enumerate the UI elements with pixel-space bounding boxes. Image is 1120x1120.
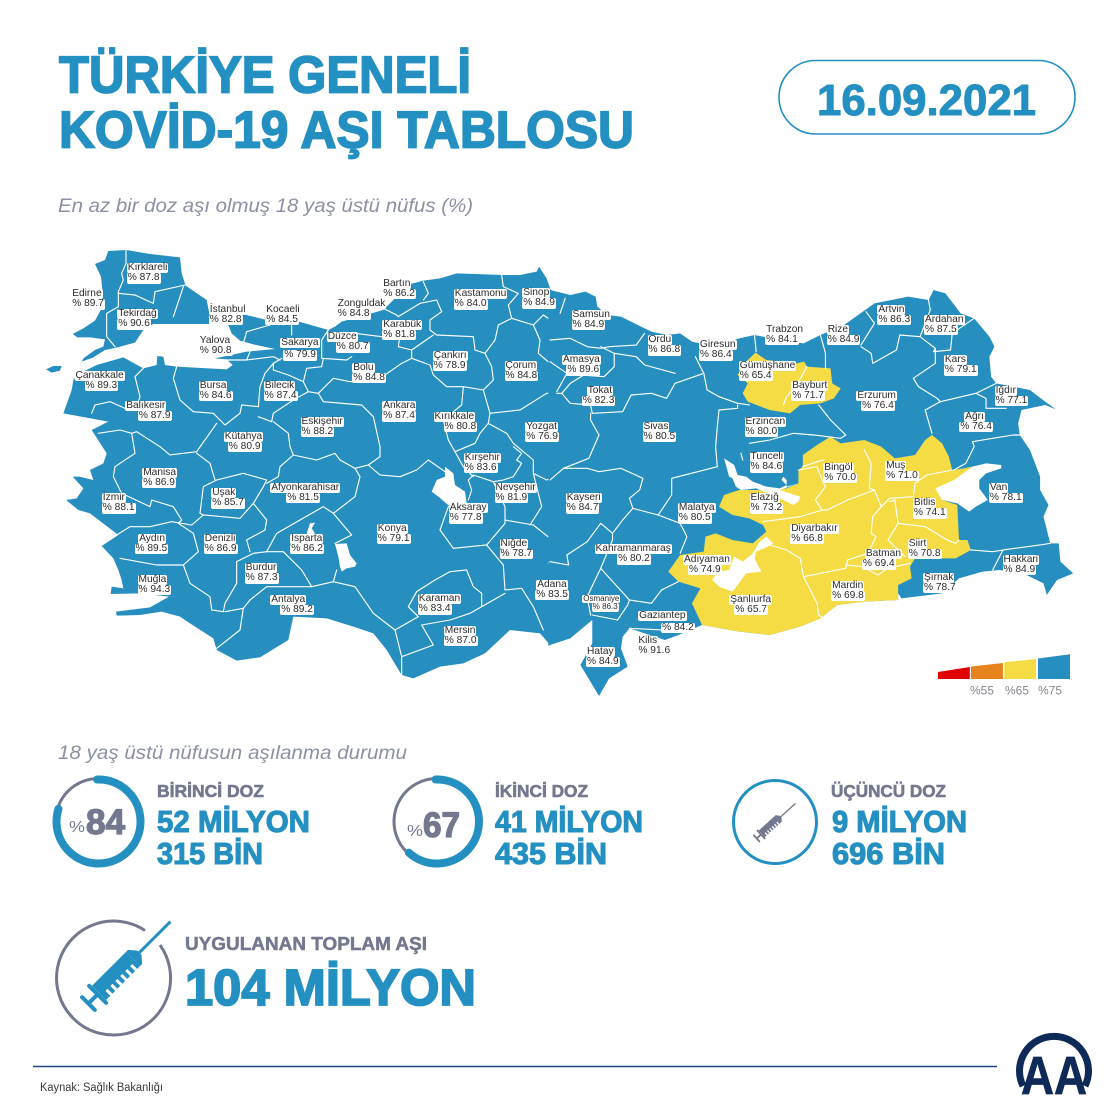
icon: large syringe in ring	[57, 912, 180, 1035]
label: Tunceli	[750, 452, 784, 473]
label: Adıyaman: Adıyaman	[684, 554, 730, 564]
label: Ankara: % 87.4	[383, 410, 415, 421]
map legend: %75	[1038, 684, 1062, 698]
label: Tokat: Tokat	[588, 385, 612, 396]
label: Sinop: Sinop	[523, 287, 549, 298]
label: İzmir: % 88.1	[103, 502, 135, 513]
panel: third dose: ÜÇÜNCÜ DOZ	[831, 781, 946, 801]
map legend	[938, 654, 1070, 698]
date pill	[779, 60, 1075, 134]
label: Kilis	[638, 636, 671, 656]
label: Bartın: % 86.2	[383, 288, 415, 299]
label: Van: Van	[990, 482, 1007, 493]
label: Zonguldak: Zonguldak	[338, 298, 385, 309]
label: Kars: % 79.1	[945, 364, 977, 375]
label: İzmir	[102, 491, 136, 514]
label: Muş	[886, 460, 919, 481]
label: Mardin: % 69.8	[832, 590, 864, 601]
label: Isparta: Isparta	[291, 533, 322, 544]
label: Denizli: % 86.9	[205, 543, 237, 554]
label: Erzincan	[746, 417, 786, 437]
label: Kastamonu: Kastamonu	[455, 288, 506, 299]
label: Osmaniye: % 86.3	[593, 602, 618, 611]
panel: total doses: UYGULANAN TOPLAM AŞI	[185, 933, 427, 954]
label: Gaziantep: Gaziantep	[639, 610, 686, 620]
label: Nevşehir: % 81.9	[496, 492, 527, 503]
label: Giresun: Giresun	[700, 339, 736, 350]
label: Kars: Kars	[945, 354, 966, 365]
label: Bolu: % 84.8	[353, 372, 385, 383]
label: Tekirdağ: % 90.6	[118, 318, 150, 329]
label: Giresun: % 86.4	[700, 349, 732, 360]
label: Diyarbakır: % 66.8	[791, 533, 823, 544]
label: Hakkari	[1004, 554, 1039, 575]
label: Mersin: % 87.0	[445, 635, 477, 646]
label: Erzurum: Erzurum	[857, 390, 896, 401]
label: İstanbul: İstanbul	[210, 304, 245, 315]
label: Ardahan: Ardahan	[925, 314, 964, 324]
label: Aksaray: Aksaray	[450, 502, 487, 513]
label: İstanbul	[209, 303, 246, 325]
label: İzmir: İzmir	[103, 492, 125, 503]
panel: first dose: 52 MİLYON	[157, 804, 310, 839]
label: Bayburt: % 71.7	[792, 390, 824, 401]
label: Trabzon: Trabzon	[766, 324, 803, 335]
label: Batman: % 69.4	[863, 558, 895, 569]
label: Adana: Adana	[537, 579, 567, 590]
label: Ardahan: % 87.5	[925, 324, 957, 335]
label: Kırıkkale: % 80.8	[444, 421, 476, 432]
label: Edirne: Edirne	[72, 288, 102, 299]
label: Samsun: % 84.9	[572, 319, 604, 330]
label: Ağrı: % 76.4	[960, 421, 992, 432]
label: Zonguldak: % 84.8	[338, 308, 370, 319]
label: Sakarya: % 79.9	[284, 349, 316, 360]
label: Yalova: % 90.8	[200, 345, 232, 356]
label: Isparta	[290, 533, 324, 554]
label: Sivas: % 80.5	[644, 431, 675, 442]
label: Tunceli: Tunceli	[750, 451, 783, 462]
label: Bursa: % 84.6	[200, 390, 232, 401]
label: Mersin: Mersin	[445, 625, 475, 636]
label: Aksaray: % 77.8	[450, 512, 482, 523]
logo: AA: AA	[1021, 1046, 1087, 1106]
label: Kütahya	[224, 431, 263, 452]
label: Manisa: Manisa	[143, 466, 176, 478]
label: Kırıkkale	[434, 410, 477, 432]
panel: first dose: BİRİNCİ DOZ	[157, 781, 264, 801]
label: Ağrı: Ağrı	[965, 410, 984, 422]
label: Kayseri: Kayseri	[567, 492, 601, 503]
label: Osmaniye	[583, 595, 620, 612]
label: Ordu: % 86.8	[648, 344, 680, 355]
label: Balıkesir: Balıkesir	[126, 400, 165, 411]
panel: second dose: 41 MİLYON	[495, 804, 643, 839]
date pill: 16.09.2021	[817, 76, 1036, 125]
label: Bingöl	[824, 462, 857, 483]
label: Yozgat	[525, 420, 559, 442]
panel: second dose	[394, 778, 643, 871]
label: Düzce	[327, 331, 370, 353]
label: Malatya	[679, 503, 716, 524]
label: Kütahya: Kütahya	[225, 431, 262, 442]
label: Kırklareli	[127, 262, 168, 284]
panel: third dose	[734, 780, 967, 871]
label: Şırnak: % 78.7	[924, 582, 956, 593]
label: Iğdır	[996, 386, 1028, 406]
label: Ardahan	[925, 314, 965, 335]
label: Edirne	[72, 288, 105, 310]
label: Adıyaman: % 74.9	[689, 564, 721, 575]
label: Nevşehir	[495, 482, 537, 503]
label: Siirt: Siirt	[909, 538, 926, 549]
title: KOVİD-19 AŞI TABLOSU	[59, 102, 634, 160]
label: Balıkesir	[125, 400, 172, 421]
label: Tokat: % 82.3	[583, 395, 614, 406]
label: Bolu: Bolu	[353, 362, 374, 372]
label: Kilis: Kilis	[638, 635, 657, 646]
label: Iğdır: % 77.1	[996, 395, 1027, 406]
label: Niğde	[500, 538, 533, 559]
label: Kırklareli: Kırklareli	[128, 262, 167, 273]
panel: third dose: 9 MİLYON	[832, 804, 967, 839]
label: Uşak	[211, 487, 245, 509]
label: Samsun: Samsun	[572, 308, 610, 320]
label: Balıkesir: % 87.9	[139, 410, 171, 421]
label: Batman	[866, 549, 902, 570]
label: Elazığ	[750, 493, 783, 514]
label: Kahramanmaraş: % 80.2	[618, 553, 650, 564]
label: Muğla: % 94.3	[138, 584, 170, 595]
label: Tekirdağ	[117, 308, 158, 330]
label: Kayseri	[567, 493, 602, 514]
label: Bayburt	[792, 381, 828, 401]
label: Karabük: Karabük	[383, 319, 421, 330]
label: Bolu	[352, 362, 386, 383]
label: Malatya: % 80.5	[679, 512, 711, 523]
label: Kırşehir	[464, 452, 501, 473]
label: Tokat	[588, 386, 615, 406]
label: Sinop	[522, 287, 556, 309]
label: Hatay: % 84.9	[587, 656, 619, 667]
label: Rize	[828, 325, 860, 345]
label: Karaman: Karaman	[419, 593, 460, 604]
panel: first dose: 315 BİN	[157, 836, 263, 871]
label: Gümüşhane: Gümüşhane	[740, 360, 795, 370]
label: Gaziantep: % 84.2	[662, 622, 694, 633]
label: Yalova	[200, 334, 233, 356]
label: Erzincan: Erzincan	[746, 416, 785, 427]
footer rule	[33, 1066, 997, 1068]
label: Amasya: Amasya	[563, 354, 600, 365]
label: Artvin: % 86.3	[878, 314, 910, 325]
label: Rize: Rize	[828, 324, 848, 335]
label: Afyonkarahisar: Afyonkarahisar	[271, 482, 339, 493]
panel: total doses	[57, 912, 476, 1035]
title: TÜRKİYE GENELİ	[59, 46, 471, 104]
label: Erzurum: % 76.4	[862, 400, 894, 411]
label: Diyarbakır: Diyarbakır	[791, 522, 838, 534]
label: Samsun	[572, 310, 611, 330]
label: Kocaeli: Kocaeli	[266, 304, 300, 315]
label: Bingöl: % 70.0	[824, 472, 856, 483]
label: Sinop: % 84.9	[523, 297, 555, 308]
label: Karabük: % 81.8	[383, 329, 415, 340]
label: Şanlıurfa	[730, 595, 772, 615]
label: Sakarya	[280, 337, 320, 361]
label: Osmaniye: Osmaniye	[583, 594, 619, 603]
label: Mardin	[832, 580, 865, 601]
label: Konya: Konya	[378, 522, 407, 534]
label: Afyonkarahisar	[270, 482, 340, 503]
label: Uşak: % 85.7	[212, 497, 244, 508]
label: Eskişehir: % 88.2	[302, 426, 333, 437]
label: Iğdır: Iğdır	[996, 385, 1016, 396]
label: Denizli	[204, 533, 238, 554]
label: Kocaeli: % 84.5	[266, 314, 298, 325]
label: Elazığ: % 73.2	[750, 502, 782, 513]
label: Antalya: Antalya	[271, 594, 305, 605]
map legend: %55	[970, 684, 994, 698]
label: Aydın: % 89.5	[136, 543, 167, 554]
label: Çankırı: Çankırı	[434, 350, 467, 360]
ring: second dose 67 percent: 67	[423, 806, 460, 845]
label: Şanlıurfa: Şanlıurfa	[730, 594, 771, 605]
label: Nevşehir: Nevşehir	[496, 482, 536, 492]
label: Van: % 78.1	[990, 492, 1022, 503]
label: Afyonkarahisar: % 81.5	[287, 492, 319, 503]
label: Muş: Muş	[886, 460, 905, 470]
label: Kayseri: % 84.7	[567, 502, 598, 513]
label: Bilecik	[264, 380, 298, 401]
label: Çanakkale	[75, 370, 125, 391]
label: Sakarya: Sakarya	[281, 337, 319, 348]
label: Mersin	[445, 626, 478, 646]
label: Şırnak	[924, 573, 957, 593]
label: Siirt: % 70.8	[909, 548, 941, 559]
label: Düzce: % 80.7	[337, 341, 369, 352]
label: Burdur	[245, 562, 279, 584]
label: Muğla	[138, 574, 171, 595]
ring: first dose 84 percent: 84	[86, 803, 126, 842]
label: Batman: Batman	[866, 548, 901, 559]
label: Çanakkale: % 89.3	[86, 380, 117, 391]
label: Çankırı: % 78.9	[434, 360, 466, 371]
label: Niğde: Niğde	[500, 538, 527, 549]
label: Van	[990, 483, 1023, 503]
label: Hatay: Hatay	[587, 646, 614, 656]
vaccination subtitle: 18 yaş üstü nüfusun aşılanma durumu	[58, 742, 407, 764]
label: Çanakkale: Çanakkale	[76, 370, 124, 380]
label: Konya	[377, 522, 411, 544]
label: Muğla: Muğla	[138, 574, 166, 584]
panel: second dose: İKİNCİ DOZ	[495, 781, 588, 801]
label: Hakkari: Hakkari	[1004, 554, 1038, 564]
label: Erzurum	[857, 391, 897, 411]
label: Adana	[537, 580, 569, 600]
label: Şırnak: Şırnak	[924, 572, 953, 583]
ring: second dose 67 percent: %	[407, 823, 423, 840]
label: Uşak: Uşak	[212, 487, 235, 498]
label: Diyarbakır	[791, 524, 839, 544]
label: Şanlıurfa: % 65.7	[735, 604, 767, 615]
label: Denizli: Denizli	[205, 533, 235, 544]
label: Ankara: Ankara	[383, 400, 415, 411]
panel: total doses: 104 MİLYON	[185, 959, 476, 1016]
label: Hatay	[587, 646, 620, 667]
label: Ağrı	[965, 412, 993, 432]
label: Kilis: % 91.6	[638, 645, 670, 656]
label: Tunceli: % 84.6	[750, 461, 782, 472]
label: Kastamonu: % 84.0	[455, 298, 487, 309]
label: Ordu	[648, 335, 681, 356]
label: Rize: % 84.9	[828, 334, 859, 345]
label: Bartın: Bartın	[383, 278, 410, 289]
label: Karaman	[419, 594, 461, 615]
ring: first dose 84 percent: %	[69, 819, 85, 836]
label: Bilecik: Bilecik	[265, 380, 294, 391]
label: Çorum: Çorum	[506, 360, 536, 370]
label: Kars	[945, 355, 978, 376]
label: Bitlis: % 74.1	[914, 507, 946, 518]
label: Eskişehir: Eskişehir	[302, 416, 343, 426]
label: Bursa: Bursa	[200, 380, 226, 391]
label: Sivas	[644, 422, 676, 442]
map legend: %65	[1005, 684, 1029, 698]
label: Artvin	[878, 304, 911, 325]
label: Trabzon: % 84.1	[766, 334, 798, 345]
label: Çankırı	[433, 350, 468, 371]
map subtitle: En az bir doz aşı olmuş 18 yaş üstü nüfus (%)	[58, 195, 473, 217]
label: Sivas: Sivas	[644, 420, 668, 432]
label: Bilecik: % 87.4	[265, 390, 297, 401]
label: Bayburt: Bayburt	[792, 380, 827, 391]
label: Bitlis	[914, 498, 947, 519]
label: Kırşehir: % 83.6	[465, 462, 497, 473]
label: Bingöl: Bingöl	[824, 462, 853, 472]
label: Antalya: % 89.2	[281, 604, 313, 615]
label: Yozgat: Yozgat	[526, 420, 557, 432]
label: İstanbul: % 82.8	[210, 314, 242, 325]
panel: second dose: 435 BİN	[495, 836, 607, 871]
label: Trabzon	[766, 325, 804, 345]
label: Yalova: Yalova	[200, 334, 230, 346]
label: Mardin: Mardin	[832, 580, 863, 590]
label: Elazığ: Elazığ	[750, 492, 779, 503]
label: Çorum: % 84.8	[506, 370, 537, 381]
label: Amasya	[563, 355, 601, 376]
label: Kahramanmaraş: Kahramanmaraş	[596, 543, 671, 554]
label: Malatya: Malatya	[679, 502, 715, 513]
label: Kırşehir: Kırşehir	[465, 452, 500, 462]
panel: first dose	[55, 778, 310, 871]
label: Adana: % 83.5	[536, 589, 568, 600]
label: Bitlis: Bitlis	[914, 497, 935, 508]
label: Ordu: Ordu	[648, 334, 671, 345]
label: Gümüşhane	[740, 360, 796, 381]
label: Antalya	[271, 595, 314, 615]
label: Karabük	[382, 319, 422, 340]
label: Kocaeli	[265, 304, 300, 325]
panel: third dose: 696 BİN	[832, 836, 945, 871]
label: Kahramanmaraş	[596, 544, 672, 565]
label: Giresun	[700, 340, 737, 361]
label: Çorum	[505, 360, 538, 381]
label: Burdur: % 87.3	[246, 572, 278, 583]
label: Isparta: % 86.2	[291, 543, 323, 554]
label: Zonguldak	[338, 298, 386, 320]
ring: first dose 84 percent	[55, 778, 142, 865]
label: Adıyaman	[684, 554, 731, 575]
label: Burdur: Burdur	[246, 562, 276, 573]
label: Muş: % 71.0	[886, 470, 918, 481]
map of Turkey	[46, 250, 1073, 696]
label: Amasya: % 89.6	[567, 364, 599, 375]
icon: syringe in ring	[734, 780, 816, 864]
label: Düzce: Düzce	[328, 331, 357, 342]
label: Erzincan: % 80.0	[746, 426, 777, 437]
label: Kırklareli: % 87.8	[128, 272, 160, 283]
label: Kastamonu	[454, 288, 507, 310]
label: Niğde: % 78.7	[500, 548, 532, 559]
label: Eskişehir	[301, 416, 344, 437]
source note: Kaynak: Sağlık Bakanlığı	[40, 1082, 163, 1094]
label: Bartın	[383, 278, 416, 299]
label: Gümüşhane: % 65.4	[740, 370, 772, 381]
label: Siirt	[909, 539, 942, 559]
label: Kırıkkale: Kırıkkale	[434, 410, 474, 422]
label: Yozgat: % 76.9	[526, 431, 558, 442]
label: Aksaray	[449, 502, 488, 524]
label: Ankara	[382, 400, 416, 422]
label: Kütahya: % 80.9	[229, 441, 261, 452]
title	[59, 46, 634, 160]
label: Aydın: Aydın	[139, 533, 165, 544]
label: Karaman: % 83.4	[419, 603, 451, 614]
label: Aydın	[135, 533, 168, 554]
label: Konya: % 79.1	[378, 533, 410, 544]
province labels	[72, 262, 1039, 667]
label: Manisa: % 86.9	[143, 477, 175, 488]
label: Gaziantep	[639, 610, 695, 633]
ring: second dose 67 percent	[394, 778, 480, 865]
label: Edirne: % 89.7	[72, 298, 104, 309]
label: Manisa	[142, 466, 177, 488]
label: Artvin: Artvin	[878, 304, 904, 314]
label: Hakkari: % 84.9	[1004, 564, 1035, 575]
label: Bursa	[199, 380, 233, 401]
label: Tekirdağ: Tekirdağ	[118, 308, 157, 319]
